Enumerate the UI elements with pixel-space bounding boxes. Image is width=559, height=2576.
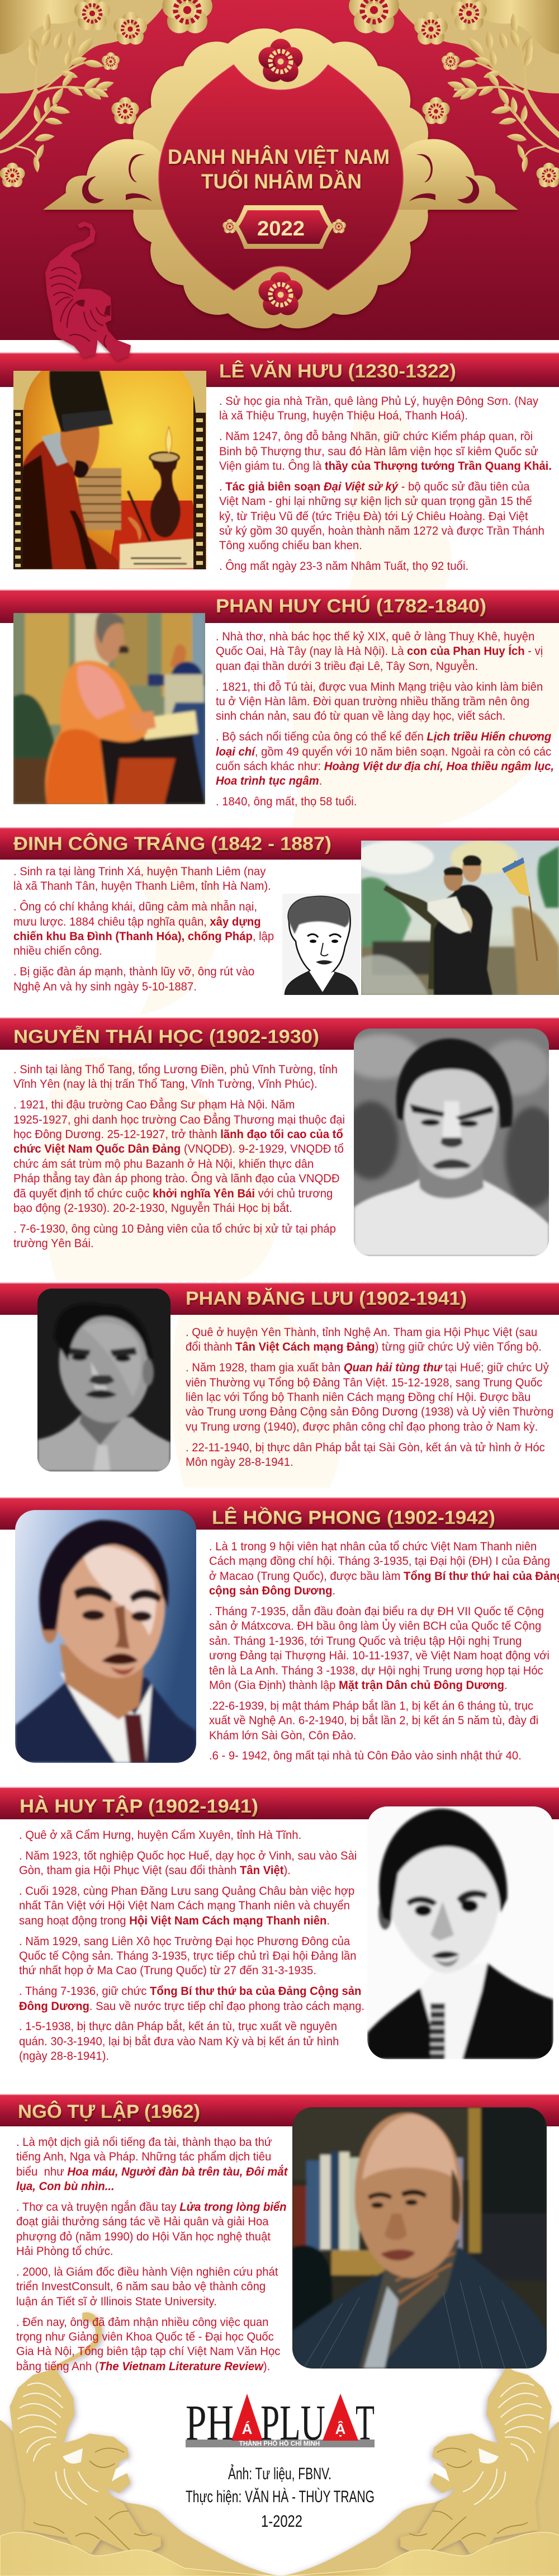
text: Lê Văn Hưu: . Năm 1247, ông đỗ bảng Nhãn, giữ chức Kiểm pháp quan, rồi: [219, 430, 533, 443]
text: Nguyễn Thái Học: học Đông Dương. 25-12-1927, trở thành lãnh đạo tối cao của tổ: [13, 1128, 343, 1141]
text: Hà Huy Tập: . Quê ở xã Cẩm Hưng, huyện Cẩm Xuyên, tỉnh Hà Tĩnh.: [19, 1829, 301, 1842]
text: Lê Văn Hưu: Binh bộ Thượng thư, sau đó Hàn lâm viện học sĩ kiêm Quốc sử: [219, 445, 538, 458]
text: Hà Huy Tập: [19, 1829, 364, 2063]
text: Hà Huy Tập: quán. 30-3-1940, lại bị bắt đưa vào Nam Kỳ và bị kết án tử hình: [19, 2035, 339, 2048]
text: Ngô Tự Lập: bằng tiếng Anh (The Vietnam Literature Review).: [16, 2360, 270, 2373]
text: Lê Hồng Phong: .6 - 9- 1942, ông mất tại nhà tù Côn Đảo vào sinh nhật thứ 40.: [209, 1749, 522, 1762]
text: Lê Văn Hưu: . Tác giả biên soạn Đại Việt sử ký - bộ quốc sử đầu tiên của: [219, 480, 530, 493]
text: Đinh Công Tráng: là xã Thanh Tân, huyện Thanh Liêm, tỉnh Hà Nam).: [13, 880, 271, 893]
heading: Đinh Công Tráng: ĐINH CÔNG TRÁNG (1842 - 1887): [13, 833, 331, 855]
heading: Phan Huy Chú: PHAN HUY CHÚ (1782-1840): [216, 596, 486, 617]
text: Phan Huy Chú: [216, 630, 554, 808]
text: Đinh Công Tráng: mưu lược. 1884 chiêu tập nghĩa quân, xây dựng: [13, 916, 261, 928]
text: Đinh Công Tráng: chiến khu Ba Đình (Thanh Hóa), chống Pháp, lập: [13, 930, 274, 943]
photo: Hà Huy Tập: [367, 1806, 553, 2059]
text: Phan Đăng Lưu: đổi thành Tân Việt Cách mạng Đảng) từng giữ chức Uỷ viên Tổng bộ.: [186, 1341, 542, 1353]
text: Ngô Tự Lập: Gia Hà Nội, Tổng biên tập tạp chí Việt Nam Văn Học: [16, 2345, 280, 2358]
text: Ngô Tự Lập: trọng như Giảng viên Khoa Quốc tế - Đại học Quốc: [16, 2330, 274, 2343]
text: Đinh Công Tráng: . Bị giặc đàn áp mạnh, thành lũy vỡ, ông rút vào: [13, 965, 254, 978]
heading: Hà Huy Tập: HÀ HUY TẬP (1902-1941): [20, 1796, 258, 1817]
text: Hà Huy Tập: . Năm 1929, sang Liên Xô học Trường Đại học Phương Đông của: [19, 1935, 350, 1948]
text: Phan Đăng Lưu: . 22-11-1940, bị thực dân Pháp bắt tại Sài Gòn, kết án và tử hình ở Hóc: [186, 1441, 545, 1454]
heading: Ngô Tự Lập: [0, 2094, 559, 2126]
text: Lê Hồng Phong: sản. Tháng 1-1936, tới Trung Quốc và triệu tập Hội nghị Trung: [209, 1635, 522, 1648]
text: Ngô Tự Lập: Hải Phòng tổ chức.: [16, 2245, 113, 2258]
credits: 1-2022: [261, 2512, 302, 2531]
logo: Pháp Luật: THÀNH PHỐ HỒ CHÍ MINH: [239, 2440, 320, 2447]
icon: top flower: [258, 39, 303, 82]
heading: Lê Văn Hưu: [0, 352, 559, 387]
photo: Phan Huy Chú: [13, 613, 205, 804]
text: Nguyễn Thái Học: Pháp thẳng tay đàn áp phong trào. Ông và lãnh đạo của VNQDĐ: [13, 1172, 340, 1185]
logo: Pháp Luật: Ậ: [335, 2421, 346, 2437]
text: Phan Huy Chú: . Nhà thơ, nhà bác học thế kỷ XIX, quê ở làng Thuỵ Khê, huyện: [216, 630, 534, 643]
text: Hà Huy Tập: thứ nhất họp ở Ma Cao (Trung Quốc) từ 27 đến 31-3-1935.: [19, 1964, 316, 1977]
text: Phan Đăng Lưu: vụ Trung ương (1940), được phân công chỉ đạo phong trào ở Nam kỳ.: [186, 1421, 538, 1433]
text: Lê Văn Hưu: [219, 395, 552, 573]
text: Nguyễn Thái Học: đã quyết định tổ chức cuộc khởi nghĩa Yên Bái với chủ trương: [13, 1187, 333, 1200]
text: Ngô Tự Lập: triển InvestConsult, 6 năm sau bảo vệ thành công: [16, 2280, 266, 2293]
text: Nguyễn Thái Học: chức ám sát trùm mộ phu Bazanh ở Hà Nội, khiến thực dân: [13, 1158, 314, 1171]
text: Hà Huy Tập: (ngày 28-8-1941).: [19, 2050, 109, 2063]
text: Đinh Công Tráng: . Sinh ra tại làng Trinh Xá, huyện Thanh Liêm (nay: [13, 865, 266, 878]
year badge: 2022: [257, 217, 305, 240]
text: Lê Hồng Phong: cộng sản Đông Dương.: [209, 1584, 335, 1597]
text: Nguyễn Thái Học: chức Việt Nam Quốc Dân Đảng (VNQDĐ). 9-2-1929, VNQDĐ tổ: [13, 1143, 344, 1155]
text: Nguyễn Thái Học: 1925-1927, ghi danh học trường Cao Đẳng Thương mại thuộc đại: [13, 1114, 345, 1126]
heading: Đinh Công Tráng: [0, 827, 559, 860]
text: Ngô Tự Lập: . 2000, là Giám đốc điều hành Viện nghiên cứu phát: [16, 2266, 278, 2278]
text: Phan Huy Chú: cuốn sách khác như: Hoàng Việt dư địa chí, Hoa thiều ngâm lục,: [216, 760, 554, 773]
photo: Lê Hồng Phong: [15, 1510, 196, 1763]
text: Lê Hồng Phong: sản ở Mátxcơva. ĐH bầu ông làm Ủy viên BCH của Quốc tế Cộng: [209, 1620, 541, 1633]
heading: Lê Hồng Phong: [0, 1497, 559, 1530]
text: Nguyễn Thái Học: trường Yên Bái.: [13, 1237, 94, 1250]
text: Phan Huy Chú: loại chí, gồm 49 quyển với 10 năm biên soạn. Ngoài ra còn có các: [216, 746, 551, 758]
text: Ngô Tự Lập: luận án Tiết sĩ ở Illinois State University.: [16, 2295, 217, 2308]
text: Hà Huy Tập: Quốc tế Cộng sản. Tháng 3-1935, trực tiếp chủ trì Đại hội Đảng lần: [19, 1950, 356, 1962]
heading: Nguyễn Thái Học: [0, 1017, 559, 1050]
heading: Phan Huy Chú: [0, 589, 559, 623]
text: Lê Văn Hưu: Việt Nam - ghi lại những sự kiện lịch sử quan trọng gần 15 thế: [219, 495, 532, 508]
text: Lê Văn Hưu: sử ký gồm 30 quyển, hoàn thành năm 1272 và được Trần Thánh: [219, 525, 544, 537]
text: Nguyễn Thái Học: Vĩnh Yên (nay là thị trấn Thổ Tang, Vĩnh Tường, Vĩnh Phúc).: [13, 1078, 318, 1091]
text: Lê Hồng Phong: Môn (Gia Định) thành lập Mặt trận Dân chủ Đông Dương.: [209, 1679, 508, 1692]
text: Phan Huy Chú: . 1821, thi đỗ Tú tài, được vua Minh Mạng triệu vào kinh làm biên: [216, 681, 543, 693]
text: Lê Hồng Phong: xuất về Nghệ An. 6-2-1940, bị bắt lần 2, bị kết án 5 năm tù, đày đi: [209, 1714, 538, 1727]
footer tiger ornaments: [0, 2311, 559, 2576]
text: Nguyễn Thái Học: [13, 1063, 345, 1250]
text: Hà Huy Tập: . Năm 1923, tốt nghiệp Quốc học Huế, dạy học ở Vinh, sau vào Sài: [19, 1850, 357, 1862]
text: Hà Huy Tập: Đông Dương. Sau về nước trực tiếp chỉ đạo phong trào cách mạng.: [19, 2000, 364, 2013]
text: Nguyễn Thái Học: . 7-6-1930, ông cùng 10 Đảng viên của tổ chức bị xử tử tại pháp: [13, 1223, 336, 1235]
text: Ngô Tự Lập: . Là một dịch giả nổi tiếng đa tài, thành thạo ba thứ: [16, 2136, 272, 2149]
text: Đinh Công Tráng: nhiều chiến công.: [13, 945, 102, 957]
photo: Ngô Tự Lập: [292, 2107, 547, 2369]
text: Ngô Tự Lập: . Thơ ca và truyện ngắn đầu tay Lửa trong lòng biển: [16, 2201, 287, 2214]
icon: red tiger: [44, 221, 133, 363]
inner oval panel: [159, 65, 403, 290]
text: Lê Văn Hưu: Viện giám tu. Ông là thầy của Thượng tướng Trần Quang Khải.: [219, 460, 552, 473]
text: Hà Huy Tập: . Cuối 1928, cùng Phan Đăng Lưu sang Quảng Châu bàn việc hợp: [19, 1885, 354, 1898]
text: Phan Huy Chú: Hoa trình tục ngâm.: [216, 775, 322, 787]
text: Phan Huy Chú: Quốc Oai, Hà Tây (nay là Hà Nội). Là con của Phan Huy Ích - vị: [216, 645, 543, 658]
photo: Nguyễn Thái Học: [354, 1028, 549, 1256]
heading: Lê Hồng Phong: LÊ HỒNG PHONG (1902-1942): [212, 1507, 495, 1528]
title: DANH NHÂN VIỆT NAM: [168, 145, 390, 168]
text: Nguyễn Thái Học: . Sinh tại làng Thổ Tang, tổng Lương Điền, phủ Vĩnh Tường, tỉnh: [13, 1063, 338, 1076]
logo: Pháp Luật: Á: [242, 2421, 253, 2437]
text: Nguyễn Thái Học: . 1921, thi đậu trường Cao Đẳng Sư phạm Hà Nội. Năm: [13, 1098, 295, 1111]
text: Phan Huy Chú: . Bộ sách nổi tiếng của ông có thể kể đến Lịch triều Hiến chương: [216, 730, 551, 743]
text: Ngô Tự Lập: lụa, Con bù nhìn...: [16, 2180, 115, 2193]
heading: Lê Văn Hưu: LÊ VĂN HƯU (1230-1322): [219, 361, 456, 382]
text: Lê Hồng Phong: tên là La Anh. Tháng 3 -1938, dự Hội nghị Trung ương họp tại Hóc: [209, 1664, 543, 1677]
illustration: Đinh Công Tráng scene: [361, 841, 559, 995]
text: Ngô Tự Lập: biểu như Hoa máu, Người đàn bà trên tàu, Đôi mắt: [16, 2165, 287, 2178]
text: Phan Đăng Lưu: . Quê ở huyện Yên Thành, tỉnh Nghệ An. Tham gia Hội Phục Việt (sau: [186, 1326, 537, 1339]
portrait sketch: Đinh Công Tráng: [282, 894, 360, 995]
title: TUỔI NHÂM DẦN: [201, 169, 362, 193]
text: Lê Hồng Phong: ương Đảng tại Thượng Hải. 10-11-1937, về Việt Nam hoạt động với: [209, 1649, 549, 1662]
heading: Ngô Tự Lập: NGÔ TỰ LẬP (1962): [18, 2101, 200, 2122]
text: Hà Huy Tập: sang hoạt động trong Hội Việt Nam Cách mạng Thanh niên.: [19, 1914, 330, 1927]
icon: bottom flower: [258, 272, 303, 315]
text: Lê Hồng Phong: . Là 1 trong 9 hội viên hạt nhân của tổ chức Việt Nam Thanh niên: [209, 1540, 537, 1553]
text: Hà Huy Tập: nhất Tân Việt với Hội Việt Nam Cách mạng Thanh niên và chuyển: [19, 1899, 350, 1912]
text: Ngô Tự Lập: phượng đỏ (năm 1990) do Hội Văn học nghệ thuật: [16, 2230, 271, 2243]
text: Phan Đăng Lưu: Môn ngày 28-8-1941.: [186, 1456, 293, 1469]
text: Phan Đăng Lưu: [186, 1326, 553, 1469]
text: Phan Đăng Lưu: viên Thường vụ Tổng bộ Đảng Tân Việt. 15-12-1928, sang Trung Quốc: [186, 1376, 542, 1389]
text: Lê Hồng Phong: Cách mạng đồng chí hội. Tháng 3-1935, tại Đại hội (ĐH) I của Đảng: [209, 1555, 550, 1568]
text: Phan Đăng Lưu: . Năm 1928, tham gia xuất bản Quan hải tùng thư tại Huế; giữ chức Uỷ: [186, 1361, 549, 1374]
text: Phan Huy Chú: . 1840, ông mất, thọ 58 tuổi.: [216, 795, 357, 808]
heading: Phan Đăng Lưu: PHAN ĐĂNG LƯU (1902-1941): [186, 1288, 467, 1309]
credits: Ảnh: Tư liệu, FBNV.: [228, 2464, 331, 2483]
text: Lê Hồng Phong: . Tháng 7-1935, dẫn đầu đoàn đại biểu ra dự ĐH VII Quốc tế Cộng: [209, 1605, 544, 1618]
text: Ngô Tự Lập: đoạt giải thưởng sáng tác về Hải quân và giải Hoa: [16, 2215, 269, 2228]
text: Ngô Tự Lập: tiếng Anh, Nga và Pháp. Những tác phẩm dịch tiêu: [16, 2150, 271, 2163]
text: Lê Văn Hưu: Tông xuống chiếu ban khen.: [219, 539, 362, 552]
text: Lê Hồng Phong: .22-6-1939, bị mật thám Pháp bắt lần 1, bị kết án 6 tháng tù, trục: [209, 1700, 533, 1712]
text: Hà Huy Tập: . 1-5-1938, bị thực dân Pháp bắt, kết án tù, trục xuất về nguyên: [19, 2020, 337, 2033]
photo: Phan Đăng Lưu: [37, 1289, 170, 1471]
text: Ngô Tự Lập: . Đến nay, ông đã đảm nhận nhiều công việc quan: [16, 2316, 268, 2329]
text: Phan Huy Chú: tu ở Viện Hàn lâm. Đời quan trường nhiều thăng trầm nên ông: [216, 695, 529, 708]
text: Lê Hồng Phong: ở Macao (Trung Quốc), được bầu làm Tổng Bí thư thứ hai của Đảng: [209, 1570, 559, 1583]
heading: Hà Huy Tập: [0, 1787, 559, 1819]
text: Phan Huy Chú: sinh chán nản, sau đó từ quan về làng dạy học, viết sách.: [216, 710, 505, 723]
heading: Nguyễn Thái Học: NGUYỄN THÁI HỌC (1902-1930): [13, 1026, 319, 1048]
header banner: [0, 0, 559, 568]
text: Lê Văn Hưu: kỷ, từ Triệu Vũ đế (tức Triệu Đà) tới Lý Chiêu Hoàng. Đại Việt: [219, 510, 528, 523]
text: Đinh Công Tráng: [13, 865, 274, 993]
photo: Lê Văn Hưu: [13, 371, 206, 569]
text: Hà Huy Tập: Gòn, tham gia Hội Phục Việt (sau đổi thành Tân Việt).: [19, 1864, 291, 1877]
title: [168, 145, 390, 193]
text: Phan Đăng Lưu: vào Trung ương Đảng Cộng sản Đông Dương (1938) và Uỷ viên Thường: [186, 1405, 553, 1418]
text: Lê Văn Hưu: là xã Thiệu Trung, huyện Thiệu Hoá, Thanh Hoá).: [219, 409, 468, 422]
text: Đinh Công Tráng: Nghệ An và hy sinh ngày 5-10-1887.: [13, 980, 197, 993]
text: Phan Đăng Lưu: liên lạc với Tổng bộ Thanh niên Cách mạng Đồng chí Hội. Được bầu: [186, 1391, 530, 1404]
logo: Pháp Luật: [186, 2394, 375, 2448]
text: Phan Huy Chú: quan đại thần dưới 3 triều đại Lê, Tây Sơn, Nguyễn.: [216, 660, 478, 673]
credits: [186, 2464, 375, 2531]
ornamental frame: [43, 29, 518, 328]
year badge: [222, 205, 346, 249]
text: Lê Hồng Phong: Khám lớn Sài Gòn, Côn Đảo.: [209, 1729, 356, 1742]
text: Ngô Tự Lập: [16, 2136, 288, 2373]
text: Lê Văn Hưu: . Sử học gia nhà Trần, quê làng Phủ Lý, huyện Đông Sơn. (Nay: [219, 395, 538, 408]
text: Lê Văn Hưu: . Ông mất ngày 23-3 năm Nhâm Tuất, thọ 92 tuổi.: [219, 560, 468, 573]
text: Lê Hồng Phong: [209, 1540, 559, 1762]
text: Hà Huy Tập: . Tháng 7-1936, giữ chức Tổng Bí thư thứ ba của Đảng Cộng sản: [19, 1985, 361, 1998]
heading: Phan Đăng Lưu: [0, 1282, 559, 1315]
text: Nguyễn Thái Học: bạo động (2-1930). 20-2-1930, Nguyễn Thái Học bị bắt.: [13, 1202, 292, 1215]
text: Đinh Công Tráng: . Ông có chí khảng khái, dũng cảm mà nhẫn nại,: [13, 900, 257, 913]
